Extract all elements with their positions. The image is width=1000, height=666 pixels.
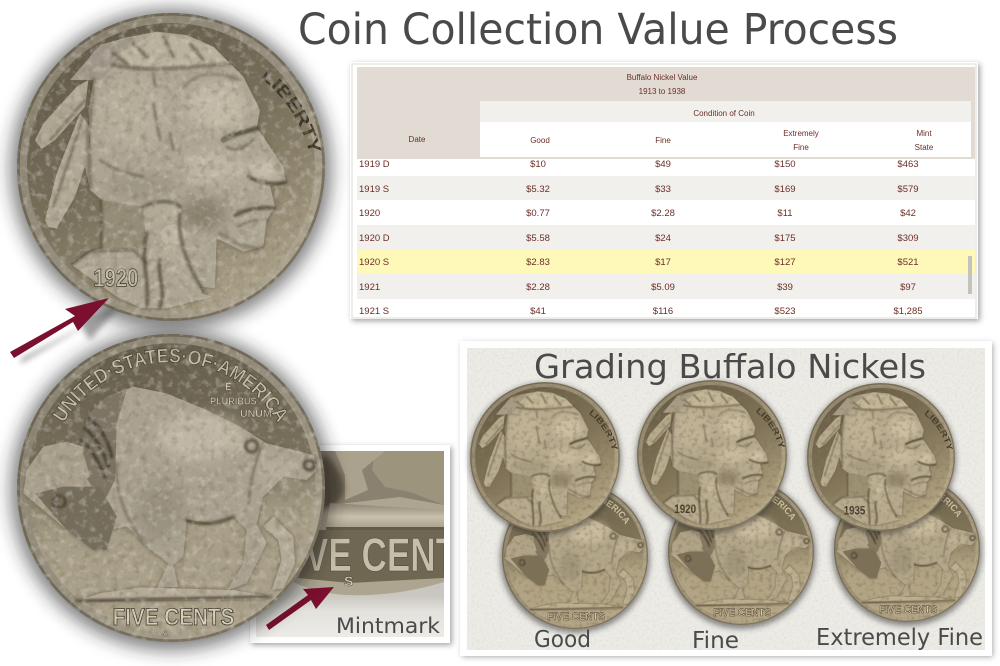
- table header: 1913 to 1938: [639, 87, 686, 96]
- coin pair: fine: AMERICA: [772, 496, 795, 520]
- table rows: $579: [897, 184, 919, 195]
- highlighted row: 1920 S: $17: [655, 257, 671, 268]
- table rows: $39: [777, 282, 793, 293]
- table rows: $41: [530, 306, 546, 317]
- table rows: $5.09: [651, 282, 675, 293]
- coin pair: good: LIBERTY: [589, 410, 618, 449]
- table rows: [357, 159, 975, 317]
- table header: Date: [409, 135, 426, 144]
- table header: Mint: [916, 129, 932, 138]
- table header: Good: [530, 136, 550, 145]
- arrow shadow: [20, 306, 120, 364]
- table rows: 1920 D: [359, 233, 390, 244]
- table header: [357, 67, 975, 159]
- table rows: $150: [774, 159, 796, 170]
- table rows: $10: [530, 159, 546, 170]
- coin pair: fine: FIVE CENTS: [713, 607, 771, 619]
- arrow: mintmark: [266, 587, 334, 630]
- arrow: to mintmark location on obverse: [10, 298, 109, 358]
- coin pair: extremely fine: LIBERTY: [924, 410, 953, 449]
- table rows: $523: [774, 306, 796, 317]
- table rows: $2.28: [651, 208, 675, 219]
- highlighted row: 1920 S: $127: [774, 257, 796, 268]
- table header: Fine: [655, 136, 671, 145]
- label: good: Good: [534, 627, 591, 653]
- title: Coin Collection Value Process: [298, 5, 898, 55]
- panel: grading buffalo nickels: [458, 340, 996, 660]
- coin pair: extremely fine: FIVE CENTS: [879, 604, 937, 616]
- text: mintmark s: S: [162, 629, 168, 638]
- label: mintmark: Mintmark: [336, 614, 441, 638]
- table rows: 1919 S: [359, 184, 389, 195]
- table header: Fine: [793, 143, 809, 152]
- table rows: $11: [777, 208, 793, 219]
- coin pair: fine: 1920: [674, 502, 696, 516]
- coin pair: extremely fine: [802, 380, 986, 630]
- text: five cents on coin: VE CENT: [305, 528, 457, 581]
- table rows: $175: [774, 233, 796, 244]
- table rows: $5.32: [526, 184, 550, 195]
- table header: Buffalo Nickel Value: [627, 73, 698, 82]
- mintmark letter S: S: [344, 573, 353, 589]
- coin: reverse buffalo: [0, 319, 342, 664]
- table rows: $463: [897, 159, 919, 170]
- table header: Extremely: [783, 129, 819, 138]
- table rows: $5.58: [526, 233, 550, 244]
- text: e pluribus unum: PLURIBUS: [210, 396, 257, 407]
- text: e pluribus unum: [210, 382, 272, 420]
- table rows: $1,285: [893, 306, 923, 317]
- highlighted row: 1920 S: [357, 250, 975, 274]
- table rows: $0.77: [526, 208, 550, 219]
- label: extremely fine: Extremely Fine: [816, 625, 983, 651]
- coin pair: good: [465, 379, 654, 636]
- highlighted row: 1920 S: $521: [897, 257, 919, 268]
- coin pair: extremely fine: 1935: [844, 503, 866, 517]
- table rows: $49: [655, 159, 671, 170]
- text: e pluribus unum: UNUM: [240, 409, 272, 420]
- heading: grading: Grading Buffalo Nickels: [534, 347, 926, 386]
- table rows: 1919 D: [359, 159, 390, 170]
- table rows: $116: [653, 306, 673, 317]
- text: united states of america: UNITED·STATES·OF·AMERICA: [52, 348, 288, 424]
- panel: value table: [350, 62, 980, 321]
- scrollbar: [968, 256, 972, 294]
- table rows: $2.28: [526, 282, 550, 293]
- coin pair: fine: LIBERTY: [756, 408, 785, 447]
- coin close-up crop: [293, 451, 444, 596]
- panel: mintmark close-up: [250, 445, 457, 645]
- table rows: $42: [900, 208, 916, 219]
- coin pair: good: AMERICA: [604, 498, 629, 524]
- table rows: $24: [655, 233, 671, 244]
- table header: State: [915, 143, 934, 152]
- text: five cents: FIVE CENTS: [113, 604, 234, 631]
- table rows: $169: [774, 184, 796, 195]
- table rows: $97: [900, 282, 916, 293]
- table rows: $309: [897, 233, 919, 244]
- table rows: 1921: [359, 282, 380, 293]
- table header: Condition of Coin: [693, 109, 755, 118]
- table rows: 1921 S: [359, 306, 389, 317]
- text: liberty: LIBERTY: [261, 69, 322, 150]
- text: e pluribus unum: E: [225, 382, 232, 393]
- table rows: 1920: [359, 208, 380, 219]
- coin pair: good: FIVE CENTS: [547, 611, 605, 623]
- table rows: $33: [655, 184, 671, 195]
- coin: obverse 1920: [0, 0, 344, 338]
- text: date: 1920: [93, 265, 138, 293]
- label: fine: Fine: [692, 628, 739, 654]
- highlighted row: 1920 S: 1920 S: [359, 257, 389, 268]
- coin pair: extremely fine: AMERICA: [941, 495, 961, 518]
- highlighted row: 1920 S: $2.83: [526, 257, 550, 268]
- coin pair: fine: [632, 378, 820, 633]
